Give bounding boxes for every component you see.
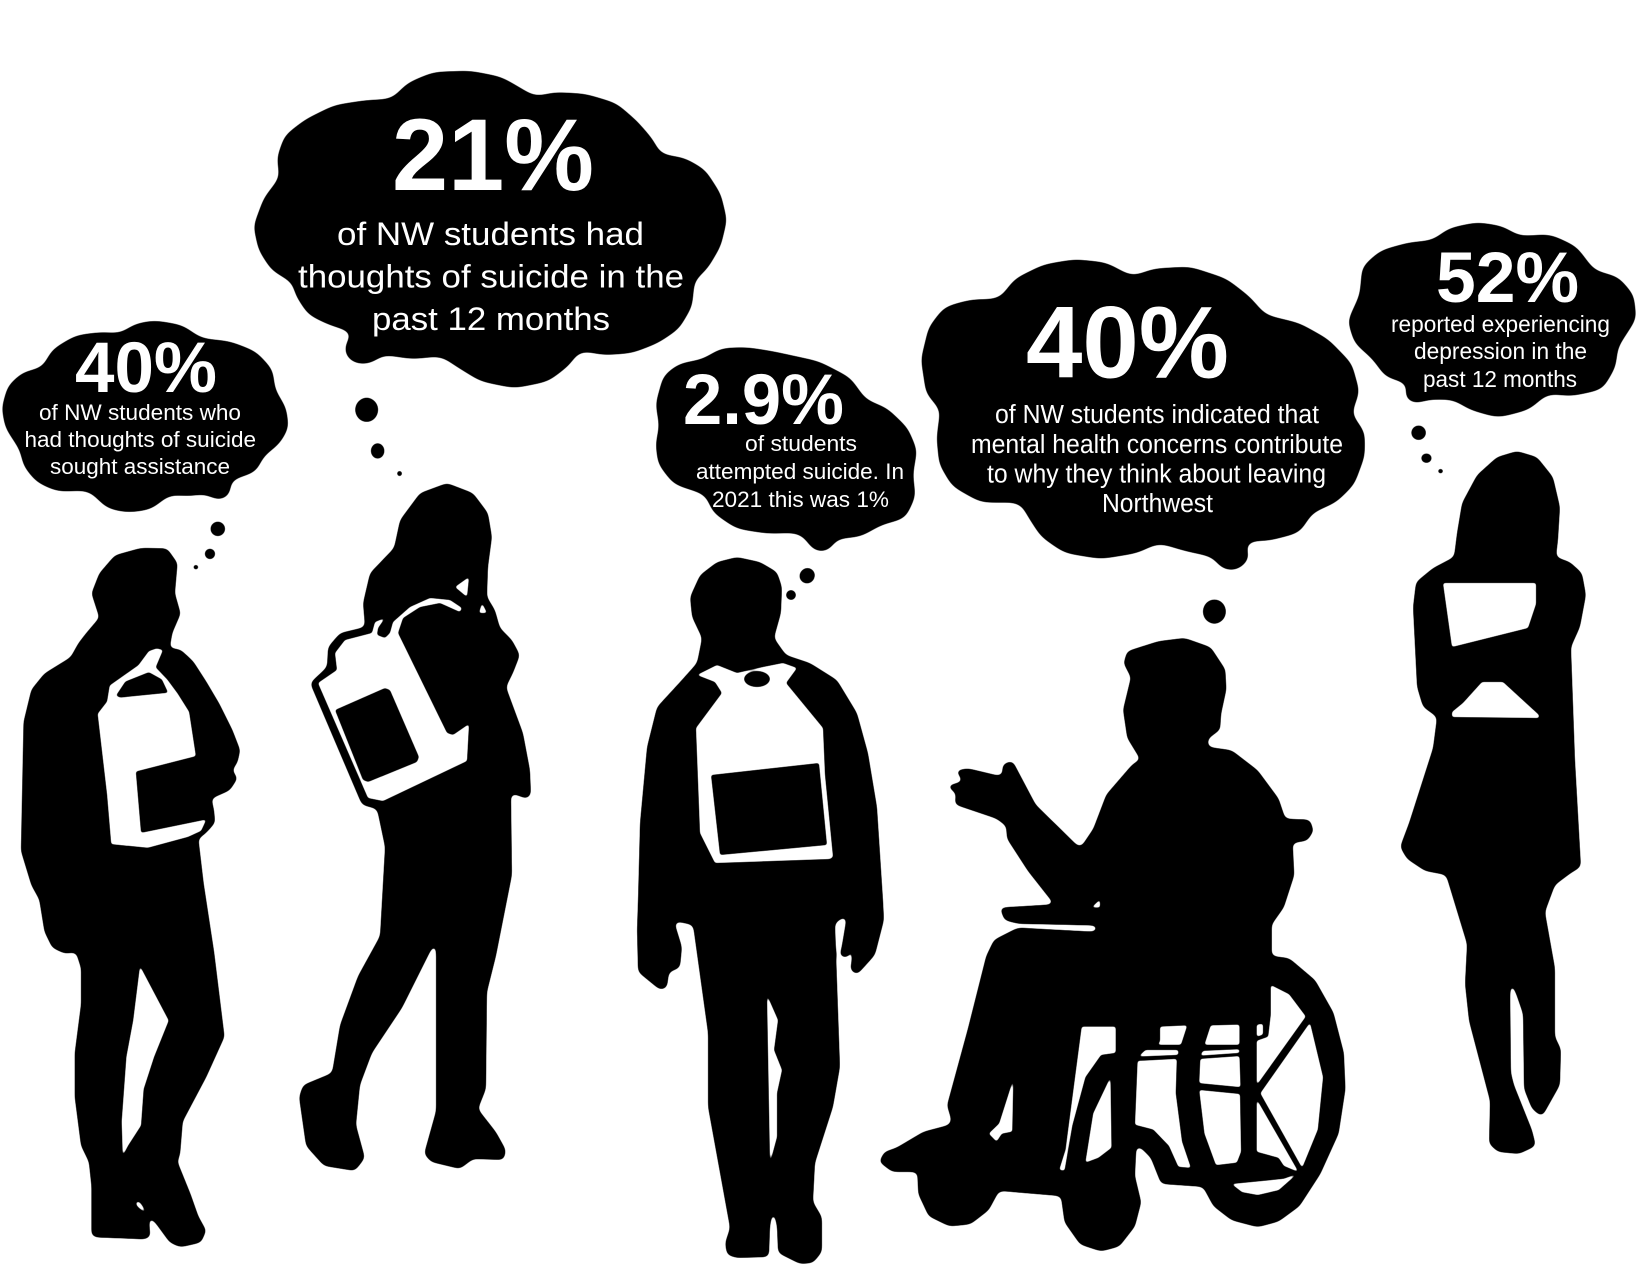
callout text: 40% sought assistance: had thoughts of suicide [24, 427, 256, 452]
callout text: 52% depression: depression in the [1414, 338, 1587, 364]
thought cloud: 2.9% attempted suicide [656, 347, 917, 600]
figure: student with backpack, left [21, 548, 240, 1247]
callout text: 52% depression: 52% [1436, 239, 1579, 318]
callout text: 21% thoughts of suicide: of NW students had [337, 216, 644, 252]
callout text: 2.9% attempted suicide [683, 361, 904, 512]
callout text: 40% sought assistance: of NW students who [39, 400, 241, 425]
figure: student with backpack, from behind [637, 557, 884, 1264]
callout text: 40% thinking about leaving: Northwest [1102, 490, 1213, 518]
callout text: 2.9% attempted suicide: attempted suicide. In [696, 459, 904, 484]
callout text: 2.9% attempted suicide: 2021 this was 1% [712, 487, 889, 512]
callout text: 40% sought assistance: 40% [75, 329, 217, 408]
figure: woman holding notebook [1400, 451, 1586, 1154]
callout text: 2.9% attempted suicide: of students [745, 431, 857, 456]
callout text: 40% thinking about leaving: of NW students indicated that [995, 401, 1319, 429]
callout text: 21% thoughts of suicide [298, 98, 684, 337]
callout text: 21% thoughts of suicide: thoughts of suicide in the [298, 258, 684, 294]
figure: person in wheelchair [879, 638, 1345, 1251]
callout text: 40% thinking about leaving: to why they think about leaving [987, 460, 1326, 488]
thought cloud: 40% sought assistance [2, 320, 289, 570]
callout text: 40% sought assistance [24, 329, 256, 479]
callout text: 21% thoughts of suicide: 21% [392, 98, 594, 212]
callout text: 40% thinking about leaving: mental health concerns contribute [971, 431, 1343, 459]
callout text: 40% sought assistance: sought assistance [50, 454, 230, 479]
callout text: 52% depression [1391, 239, 1610, 392]
figure: student with backpack, side view [299, 483, 531, 1171]
thought cloud: 52% depression [1348, 222, 1636, 474]
callout text: 40% thinking about leaving [971, 286, 1343, 518]
callout text: 52% depression: past 12 months [1423, 366, 1577, 392]
callout text: 21% thoughts of suicide: past 12 months [372, 301, 610, 337]
thought cloud: 40% thinking about leaving [921, 259, 1365, 624]
callout text: 52% depression: reported experiencing [1391, 311, 1610, 337]
callout text: 2.9% attempted suicide: 2.9% [683, 361, 844, 440]
thought cloud: 21% thoughts of suicide [253, 71, 727, 476]
callout text: 40% thinking about leaving: 40% [1026, 286, 1229, 400]
